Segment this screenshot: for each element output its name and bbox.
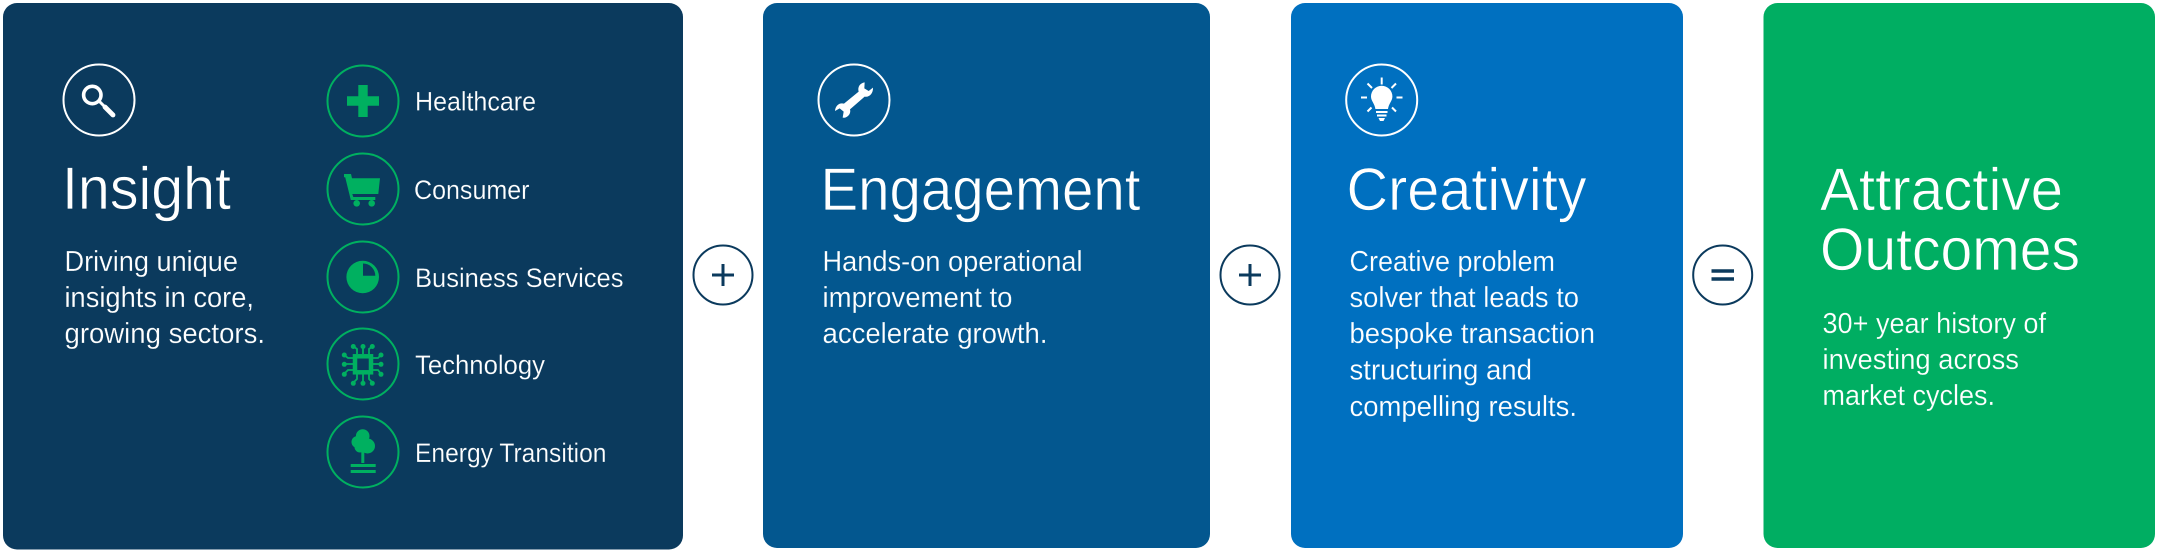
icon: light bulb xyxy=(1346,64,1417,136)
text: creativity description: Creative problem xyxy=(1350,246,1555,278)
heading: attractive outcomes: Attractive xyxy=(1820,156,2063,223)
sector: energy transition: Energy Transition xyxy=(415,438,606,468)
text: insight description: insights in core, xyxy=(64,282,254,314)
heading: attractive outcomes: Outcomes xyxy=(1820,216,2080,283)
text: outcomes description: investing across xyxy=(1822,344,2019,376)
text: insight description: growing sectors. xyxy=(64,318,265,350)
heading: insight: Insight xyxy=(62,155,231,222)
sector: energy transition xyxy=(328,416,606,488)
operator: plus xyxy=(1220,246,1280,304)
panel: creativity xyxy=(1291,3,1683,548)
text: creativity description xyxy=(1350,246,1595,423)
sector: technology: Technology xyxy=(415,350,546,380)
icon: wrench xyxy=(818,64,890,136)
operator: equals xyxy=(1693,246,1752,304)
sector: business services xyxy=(328,242,624,312)
heading: creativity: Creativity xyxy=(1346,156,1586,223)
text: creativity description: solver that leads to xyxy=(1350,282,1579,314)
text: engagement description: improvement to xyxy=(822,282,1012,314)
operator: plus xyxy=(694,246,752,304)
sector: healthcare: Healthcare xyxy=(415,86,536,116)
text: creativity description: bespoke transaction xyxy=(1350,318,1595,350)
text: engagement description: accelerate growth. xyxy=(822,318,1048,350)
heading: attractive outcomes xyxy=(1820,156,2080,283)
text: outcomes description: market cycles. xyxy=(1822,380,1995,412)
heading: engagement: Engagement xyxy=(820,156,1141,223)
text: outcomes description: 30+ year history of xyxy=(1822,308,2046,340)
text: insight description: Driving unique xyxy=(64,246,238,278)
text: creativity description: compelling results. xyxy=(1350,391,1577,423)
panel: insight xyxy=(3,3,683,550)
sector: consumer: Consumer xyxy=(414,175,530,205)
panel: attractive outcomes xyxy=(1764,3,2155,548)
text: outcomes description xyxy=(1822,308,2046,412)
text: engagement description: Hands-on operational xyxy=(822,246,1082,278)
text: insight description xyxy=(64,246,265,350)
text: creativity description: structuring and xyxy=(1350,354,1532,386)
sector: business services: Business Services xyxy=(415,263,624,293)
text: engagement description xyxy=(822,246,1082,350)
panel: engagement xyxy=(763,3,1210,548)
sector: consumer xyxy=(328,154,530,224)
icon: magnifying glass xyxy=(64,64,134,136)
sector: technology xyxy=(328,328,546,400)
sector: healthcare xyxy=(328,66,536,136)
